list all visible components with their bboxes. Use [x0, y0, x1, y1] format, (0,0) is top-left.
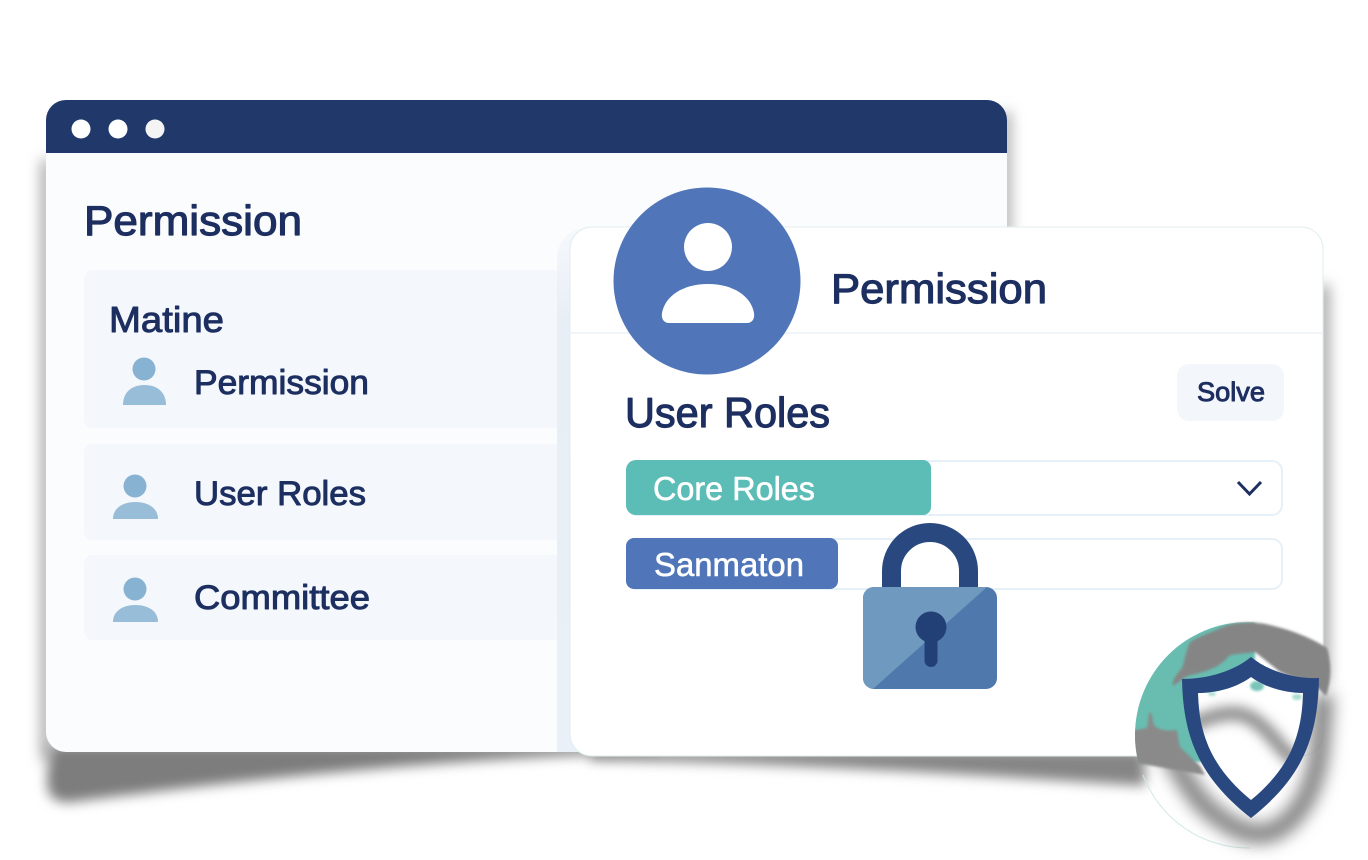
icon: user [113, 578, 158, 622]
list row: User Roles: User Roles [194, 475, 366, 513]
list row: Matine / Permission [84, 270, 584, 428]
card heading: Permission [831, 265, 1047, 312]
list row: Matine / Permission: Matine [109, 299, 224, 340]
panel: user roles card [557, 188, 1323, 756]
card shadow [590, 285, 1328, 786]
list row: Committee: Committee [194, 579, 370, 617]
list row: Committee [84, 555, 584, 640]
window body [46, 100, 1007, 752]
icon: shield [1182, 657, 1319, 818]
globe [1125, 622, 1330, 775]
dropdown: Sanmaton [626, 538, 1282, 589]
window heading: Permission [84, 197, 302, 244]
window title bar [46, 100, 1007, 153]
dropdown: Core Roles: Core Roles [653, 470, 815, 507]
globe and shield badge [1125, 622, 1330, 848]
dropdown: Sanmaton: Sanmaton [654, 546, 804, 583]
globe outline [1143, 775, 1250, 848]
icon: padlock [863, 532, 997, 689]
list row: User Roles [84, 444, 584, 540]
button: Solve [1177, 364, 1284, 421]
icon: user [113, 474, 158, 519]
card body [570, 227, 1323, 756]
dropdown: Core Roles [626, 460, 1282, 515]
globe shaded cap [1173, 623, 1330, 696]
shield interior [1198, 677, 1302, 768]
window control dots [72, 120, 164, 138]
subheading: User Roles [625, 389, 830, 436]
button: Solve: Solve [1197, 377, 1265, 407]
window shadow [42, 112, 1010, 802]
panel: permission window [46, 100, 1007, 752]
shield cast shadow [1168, 695, 1324, 834]
card side band [557, 228, 600, 752]
header divider [571, 332, 1322, 334]
icon: avatar [614, 188, 800, 374]
icon: user [123, 358, 166, 405]
icon: chevron [1238, 482, 1261, 494]
list row: Matine / Permission: Permission [194, 364, 369, 402]
